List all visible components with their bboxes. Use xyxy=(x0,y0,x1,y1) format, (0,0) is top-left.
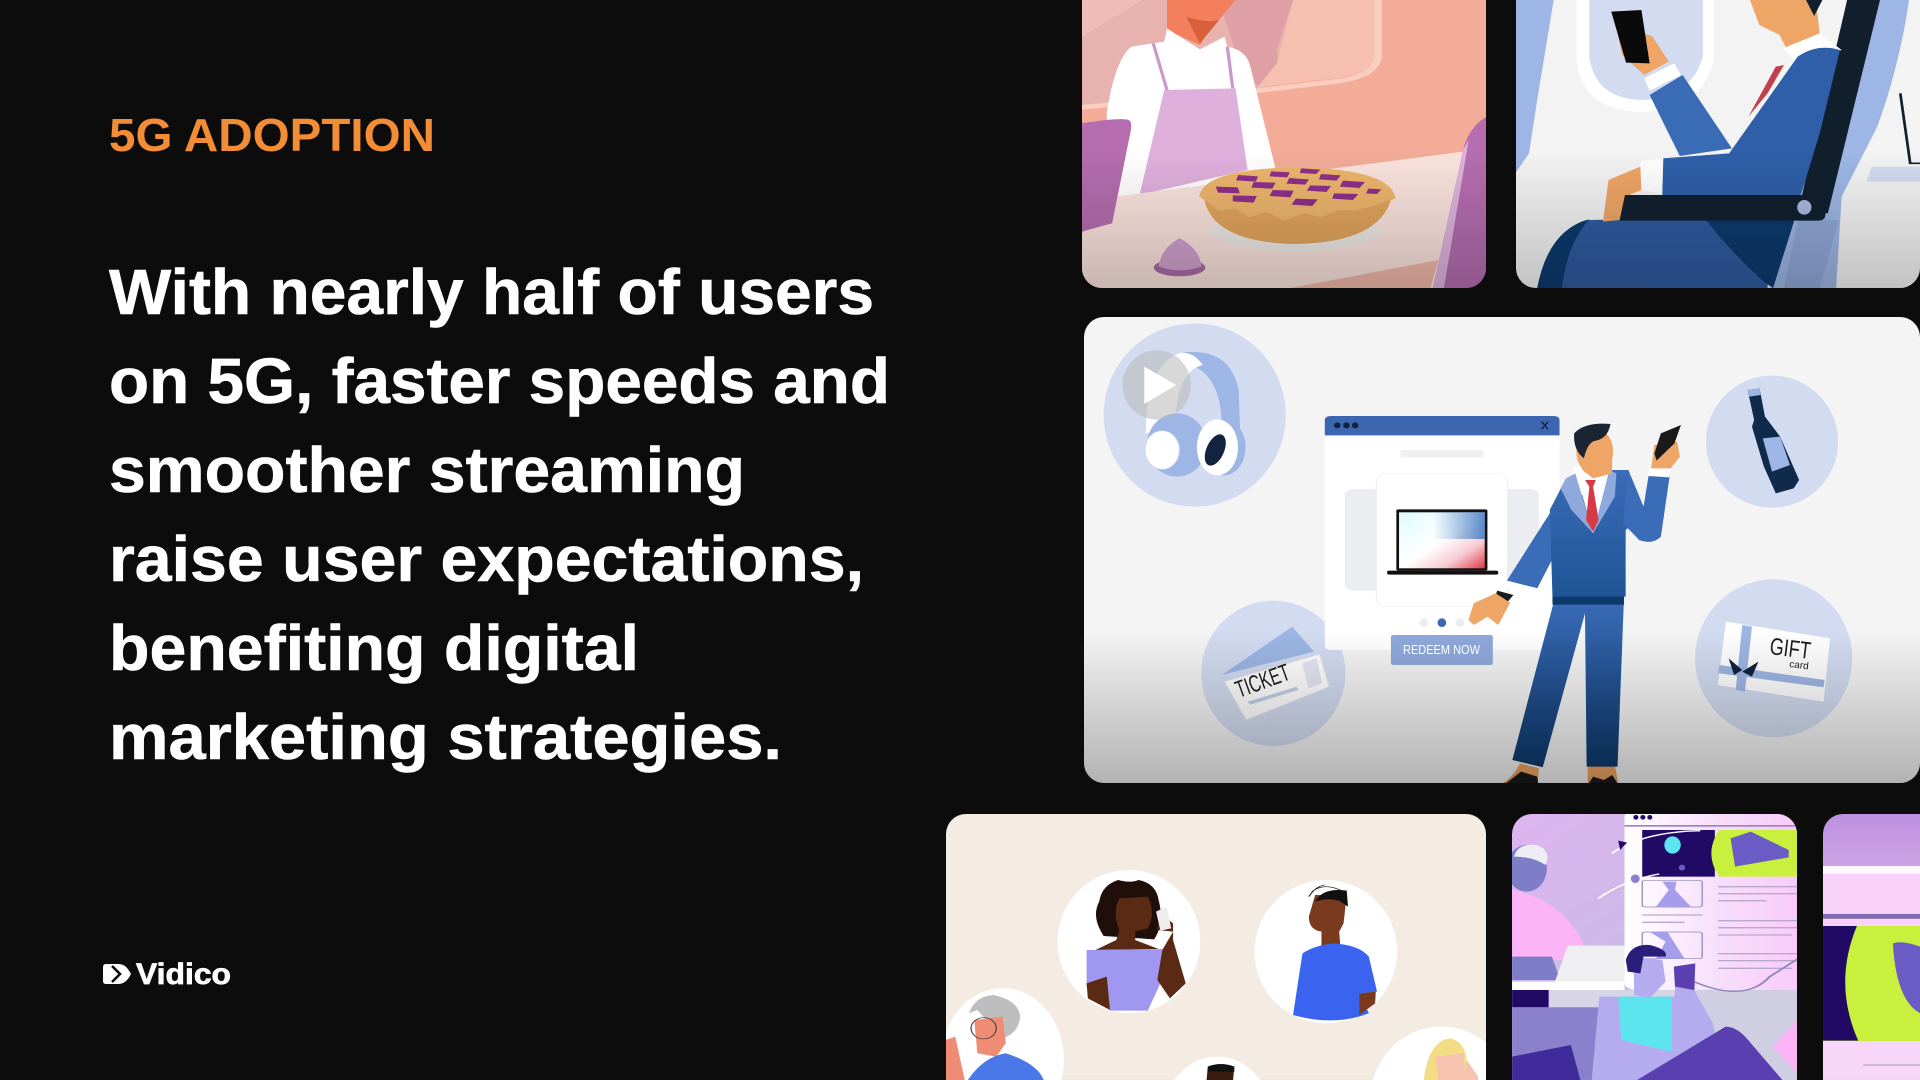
logo: Vidico xyxy=(103,958,231,991)
businessman xyxy=(1468,424,1681,785)
icon: gift card circle xyxy=(1695,579,1852,737)
pie xyxy=(1199,168,1396,251)
person with phone xyxy=(1592,945,1797,1080)
icon: ticket circle xyxy=(1201,601,1345,746)
main statement: smoother streaming xyxy=(109,434,745,506)
gift label: GIFT xyxy=(1768,633,1813,665)
panel: chef with pie xyxy=(1082,0,1488,288)
person: older woman xyxy=(941,988,1064,1080)
chef figure xyxy=(1107,0,1277,203)
main statement: With nearly half of users xyxy=(109,256,874,328)
panel: shopping page illustration xyxy=(1506,810,1808,1080)
panel: people on phones xyxy=(941,810,1510,1080)
desk and laptop xyxy=(1512,946,1801,1080)
panel: airplane passenger xyxy=(1515,0,1920,288)
eyebrow heading: 5G ADOPTION xyxy=(109,109,435,161)
airplane window xyxy=(1577,0,1714,112)
person: blonde woman xyxy=(1373,1026,1486,1080)
main statement: on 5G, faster speeds and xyxy=(109,345,890,417)
seated older man xyxy=(1506,845,1583,980)
main statement: benefiting digital xyxy=(109,612,639,684)
person: lower middle xyxy=(1174,1057,1260,1080)
main statement: raise user expectations, xyxy=(109,523,864,595)
ticket shapes xyxy=(1222,627,1329,720)
icon: play button xyxy=(1123,350,1191,420)
logo: Vidico: Vidico xyxy=(136,958,231,991)
icon: wine bottle xyxy=(1706,376,1838,508)
panel: rewards illustration xyxy=(1081,315,1920,785)
service bell xyxy=(1154,238,1205,276)
main statement: marketing strategies. xyxy=(109,701,782,773)
person: man in blue xyxy=(1255,880,1397,1023)
seat xyxy=(1770,0,1909,288)
web page xyxy=(1598,810,1808,990)
passenger xyxy=(1537,0,1842,288)
button label: REDEEM NOW xyxy=(1403,643,1480,657)
person: woman on phone xyxy=(1058,870,1200,1013)
gift card shapes xyxy=(1718,622,1830,702)
product window xyxy=(1325,416,1560,665)
main statement xyxy=(109,256,890,773)
icon: headphones xyxy=(1104,323,1286,507)
panel: cropped page detail xyxy=(1820,810,1920,1080)
ticket label: TICKET xyxy=(1232,659,1294,704)
card label: card xyxy=(1789,659,1809,672)
